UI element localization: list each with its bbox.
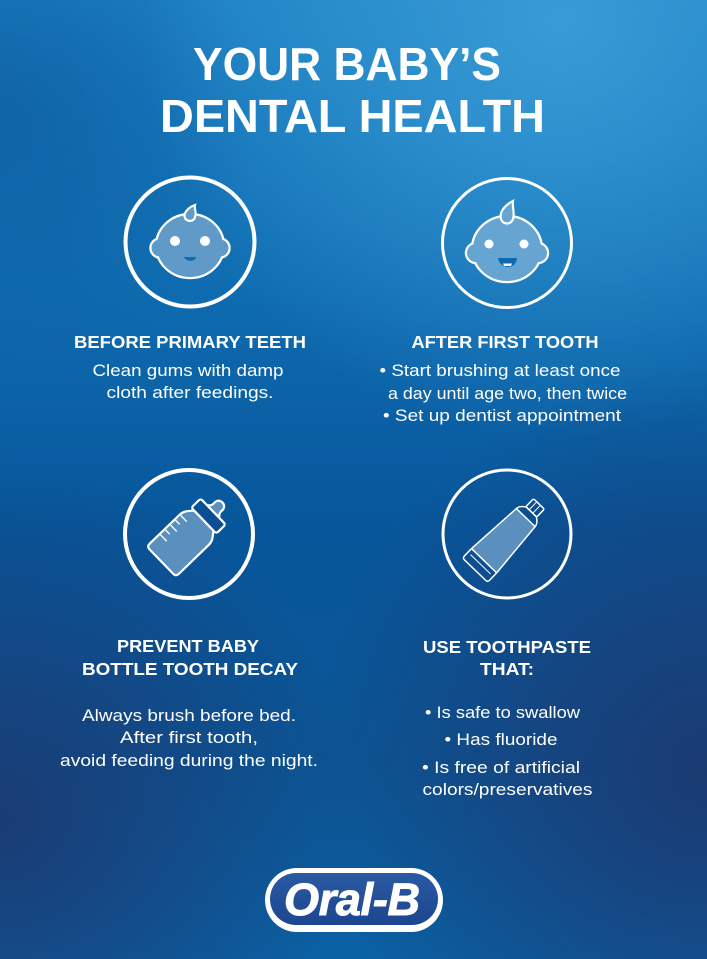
body text: cloth after feedings. <box>106 383 274 402</box>
heading: THAT: <box>480 659 534 679</box>
icon: toothpaste tube <box>443 470 571 598</box>
panel: prevent baby bottle tooth decay <box>60 470 318 770</box>
body text: After first tooth, <box>120 728 258 747</box>
panel: after first tooth <box>380 178 627 425</box>
bullet list: • Start brushing at least once <box>380 361 620 380</box>
bullet list: • Set up dentist appointment <box>383 406 621 425</box>
icon: smiling baby face <box>126 178 254 306</box>
body text: Always brush before bed. <box>82 706 296 725</box>
bullet list <box>422 703 592 799</box>
icon: baby face with tooth <box>442 178 572 308</box>
heading <box>82 636 298 679</box>
panel: before primary teeth <box>74 178 306 402</box>
bullet list: • Has fluoride <box>444 730 558 749</box>
bullet list: • Is free of artificial <box>422 758 580 777</box>
body text <box>92 361 284 402</box>
title: DENTAL HEALTH <box>160 90 545 142</box>
heading: USE TOOTHPASTE <box>423 637 591 657</box>
heading <box>423 637 591 679</box>
heading: BOTTLE TOOTH DECAY <box>82 659 298 679</box>
logo: Oral-B: Oral-B <box>284 874 420 925</box>
heading: AFTER FIRST TOOTH <box>412 332 598 352</box>
bullet list <box>380 361 627 425</box>
bullet list: • Is safe to swallow <box>425 703 581 722</box>
heading: PREVENT BABY <box>117 636 259 656</box>
icon: baby bottle <box>125 470 253 598</box>
body text <box>60 706 318 770</box>
body text: avoid feeding during the night. <box>60 751 318 770</box>
bullet list: colors/preservatives <box>422 780 592 799</box>
bullet list: a day until age two, then twice <box>388 384 627 403</box>
panel: use toothpaste <box>422 470 592 799</box>
title <box>160 38 545 142</box>
logo: Oral-B <box>265 868 443 932</box>
title: YOUR BABY’S <box>193 38 501 90</box>
heading: BEFORE PRIMARY TEETH <box>74 332 306 352</box>
body text: Clean gums with damp <box>92 361 284 380</box>
